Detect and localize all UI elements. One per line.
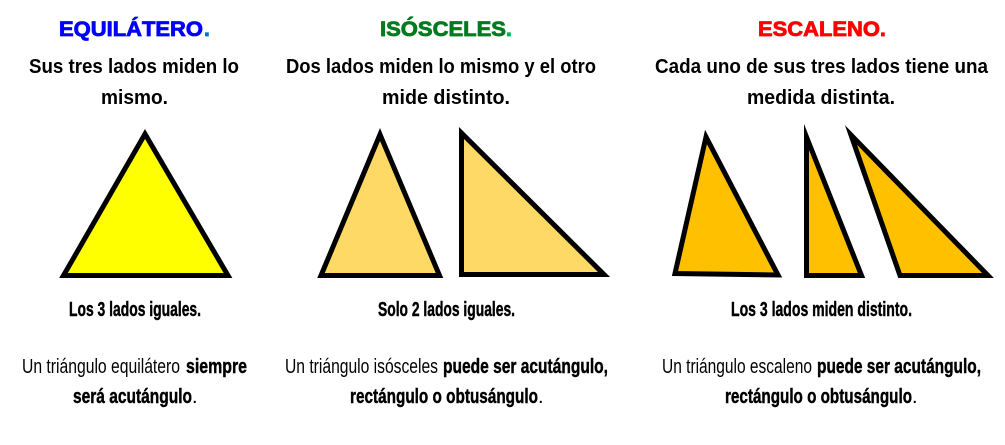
- note: isósceles: .: [538, 386, 544, 408]
- definition: escaleno: medida distinta.: [747, 87, 895, 109]
- panel: isósceles: [285, 17, 608, 408]
- triangle: isósceles rectángulo: [462, 133, 604, 274]
- definition: equilátero: mismo.: [101, 87, 168, 109]
- heading: equilátero: EQUILÁTERO: [59, 18, 203, 41]
- heading: isósceles: .: [506, 18, 512, 41]
- triangle: escaleno obtusángulo: [851, 135, 988, 276]
- caption: escaleno: Los 3 lados miden distinto.: [731, 299, 912, 321]
- note: equilátero: .: [192, 386, 198, 408]
- note: isósceles: puede ser acutángulo,: [443, 356, 608, 378]
- heading: escaleno: .: [880, 18, 886, 41]
- definition: isósceles: [286, 56, 596, 109]
- note: isósceles: [285, 356, 608, 408]
- heading: equilátero: .: [204, 18, 210, 41]
- note: isósceles: rectángulo o obtusángulo: [350, 386, 538, 408]
- note: escaleno: rectángulo o obtusángulo: [725, 386, 912, 408]
- panel: escaleno: [655, 18, 989, 408]
- definition: equilátero: [29, 56, 239, 109]
- definition: escaleno: [655, 56, 989, 109]
- definition: isósceles: mide distinto.: [382, 87, 510, 109]
- triangle: isósceles acutángulo: [321, 134, 440, 276]
- definition: escaleno: Cada uno de sus tres lados tiene una: [655, 56, 989, 78]
- note: escaleno: [662, 356, 981, 408]
- note: equilátero: siempre: [186, 356, 247, 378]
- triangle: equilátero: [64, 134, 228, 276]
- triangle: escaleno acutángulo: [675, 137, 778, 275]
- caption: isósceles: Solo 2 lados iguales.: [378, 299, 515, 321]
- note: escaleno: Un triángulo escaleno: [662, 356, 812, 378]
- note: equilátero: Un triángulo equilátero: [22, 356, 180, 378]
- note: equilátero: será acutángulo: [73, 386, 192, 408]
- caption: equilátero: Los 3 lados iguales.: [69, 299, 201, 321]
- heading: escaleno: ESCALENO: [758, 18, 880, 41]
- triangle: escaleno rectángulo: [806, 137, 862, 276]
- definition: isósceles: Dos lados miden lo mismo y el otro: [286, 56, 596, 78]
- note: escaleno: .: [912, 386, 918, 408]
- panel: equilátero: [22, 18, 247, 408]
- note: isósceles: Un triángulo isósceles: [285, 356, 438, 378]
- heading: isósceles: ISÓSCELES: [380, 17, 506, 41]
- note: equilátero: [22, 356, 247, 408]
- definition: equilátero: Sus tres lados miden lo: [29, 56, 239, 78]
